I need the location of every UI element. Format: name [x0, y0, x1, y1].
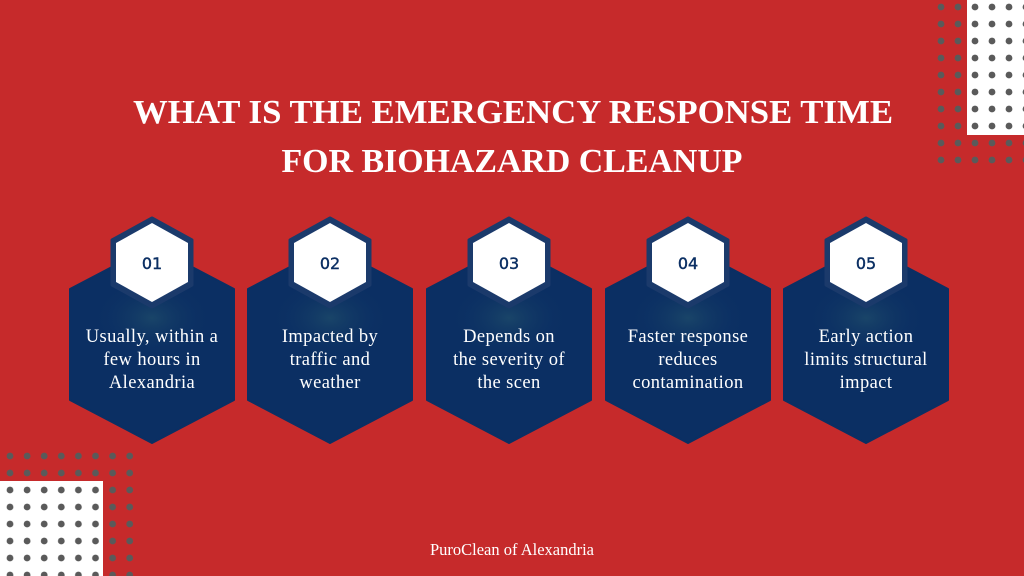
step 01: few hours in	[103, 350, 201, 370]
step 04: contamination	[632, 373, 744, 393]
step 04	[606, 218, 770, 443]
title: WHAT IS THE EMERGENCY RESPONSE TIME	[133, 94, 893, 131]
step 03: the severity of	[453, 350, 565, 370]
footer: PuroClean of Alexandria	[430, 540, 595, 559]
step 04: Faster response	[628, 327, 748, 347]
step 03: the scen	[477, 373, 541, 393]
step 04: 04	[678, 254, 698, 273]
step 03: 03	[499, 254, 519, 273]
step 05: Early action	[819, 327, 913, 347]
step 05: impact	[840, 373, 893, 393]
step 05	[784, 218, 948, 443]
step 02: Impacted by	[282, 327, 379, 347]
decoration: bottom-left dots	[0, 447, 139, 576]
step 02: weather	[299, 373, 361, 393]
title	[133, 94, 893, 180]
title: FOR BIOHAZARD CLEANUP	[282, 143, 742, 180]
step 02	[248, 218, 412, 443]
step 02: traffic and	[290, 350, 371, 370]
decoration: top-right dots	[932, 0, 1024, 168]
step 03: Depends on	[463, 327, 555, 347]
step 04: reduces	[658, 350, 718, 370]
step 05: limits structural	[804, 350, 928, 370]
step 01: Alexandria	[109, 373, 195, 393]
step 03	[427, 218, 591, 443]
step 05: 05	[856, 254, 876, 273]
step 01: 01	[142, 254, 162, 273]
step 01	[70, 218, 234, 443]
step 01: Usually, within a	[86, 327, 218, 347]
step 02: 02	[320, 254, 340, 273]
